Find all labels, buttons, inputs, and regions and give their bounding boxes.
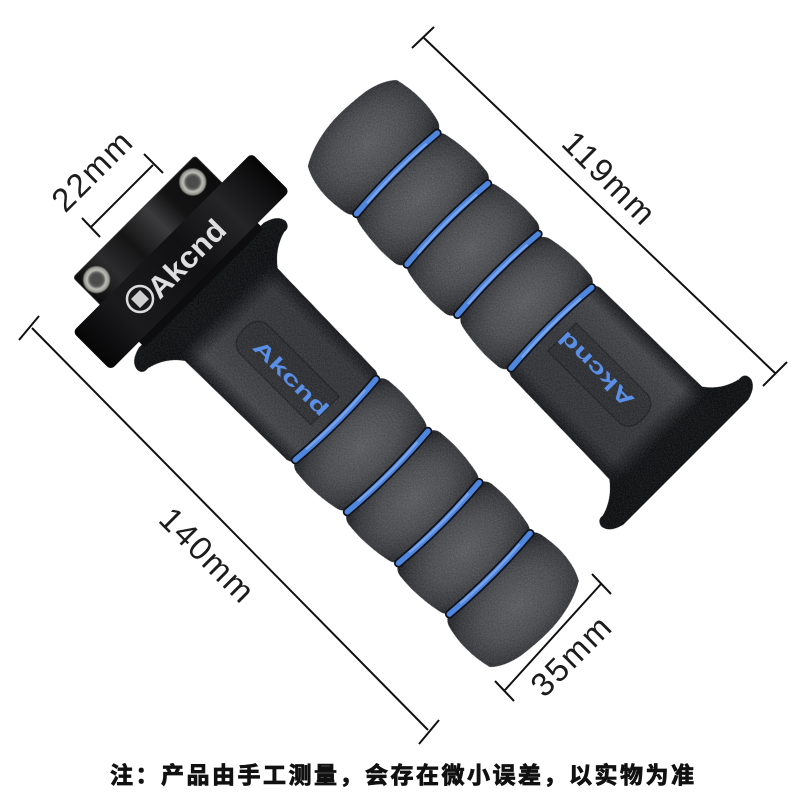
grip: right — [261, 37, 765, 541]
handle with flange — [261, 37, 765, 541]
dimension: 140mm: 140mm — [152, 500, 263, 611]
grip: left with clamp — [73, 153, 639, 720]
handle with flange — [122, 206, 626, 710]
blue rings — [355, 131, 592, 368]
dimension: 119mm: 119mm — [555, 124, 664, 233]
clamp brand text: Akcnd — [141, 213, 233, 305]
icon: upper bolt — [173, 162, 213, 202]
blue rings — [295, 379, 532, 616]
grip logo text: Akcnd — [554, 326, 639, 411]
grip logo text: Akcnd — [248, 336, 333, 421]
left grip body — [73, 153, 639, 720]
dimension: 35mm: 35mm — [523, 607, 620, 704]
icon: lower bolt — [77, 260, 116, 299]
dimension: 22mm: 22mm — [44, 122, 141, 219]
dimension: 22mm — [44, 122, 163, 237]
clamp: rear bracket with bolts — [73, 156, 226, 309]
clamp logo icon — [127, 286, 153, 312]
dimension: 140mm — [19, 316, 439, 744]
footnote: 注：产品由手工测量，会存在微小误差，以实物为准 — [110, 762, 696, 788]
dimension: 119mm — [412, 27, 787, 386]
dimension: 35mm — [495, 574, 620, 704]
clamp connector and front ring — [73, 153, 295, 376]
